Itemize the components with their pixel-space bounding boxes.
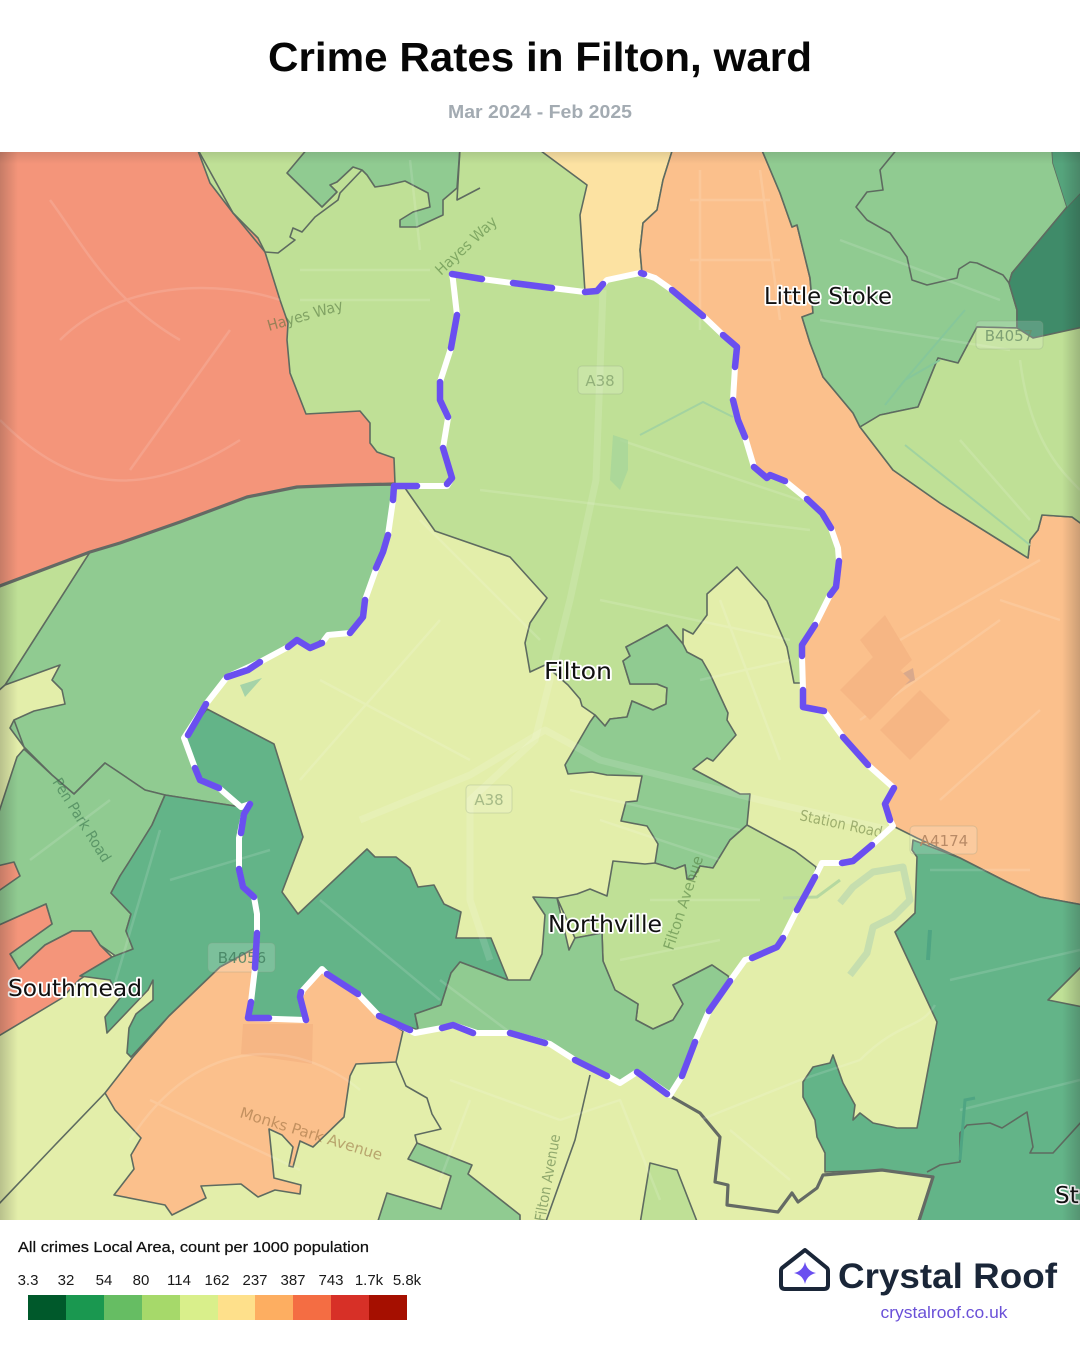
road shield: A38 centre [466,785,512,813]
legend colour scale [28,1295,407,1320]
region: top-left green blob [287,148,460,227]
region: red area north-west [0,148,395,587]
region: north-east dark green [1009,190,1080,338]
boundary lines between areas [0,148,1080,1224]
region: dark green west of ward and Northville [80,709,508,1057]
road shield: B4057: B4057 [985,327,1033,345]
legend value labels: 743 [318,1272,344,1289]
road shield: B4056 [208,943,275,972]
choropleth map [0,148,1080,1224]
legend value labels: 54 [96,1272,112,1289]
legend value labels: 3.3 [18,1272,38,1289]
street label: Pen Park Road: Pen Park Road [49,775,115,866]
logo icon: house with crystal [781,1250,828,1289]
region: top-left light green area [198,148,587,495]
ward boundary [184,273,894,1095]
legend value labels: 114 [167,1272,191,1289]
legend value labels: 237 [242,1272,268,1289]
region: east orange [640,148,1080,905]
road shield: A4174: A4174 [920,832,968,850]
road shield: A38 north [578,366,623,394]
place label: Filton: Filton [544,659,612,685]
street label: Hayes Way west: Hayes Way [265,296,345,335]
region: middle green [565,625,750,879]
place label: Southmead: Southmead [8,976,142,1002]
street label: Monks Park Avenue: Monks Park Avenue [238,1104,385,1164]
region: far-west strip [0,552,90,692]
place label: Northville: Northville [548,912,662,938]
region: ward north light green [394,273,839,726]
legend value labels: 1.7k [355,1272,384,1289]
logo wordmark: Crystal Roof [838,1257,1057,1296]
legend value labels: 387 [280,1272,306,1289]
legend value labels: 5.8k [393,1272,422,1289]
legend title: All crimes Local Area, count per 1000 population [18,1239,369,1256]
region: east light green [860,327,1080,558]
place label: Little Stoke: Little Stoke [764,284,892,310]
map edge shading [0,152,1080,1220]
street label: Hayes Way north: Hayes Way [431,212,501,279]
road shield: A38 centre: A38 [474,791,504,809]
region: south light green [640,1163,698,1224]
road shield: A38 north: A38 [585,372,615,390]
region: south orange [105,947,403,1215]
subtitle: date range: Mar 2024 - Feb 2025 [448,101,632,122]
region: Pen Park green [0,749,165,969]
region: pitch patch [241,1024,313,1064]
road shield: A4174 [910,826,977,854]
region: pale yellow north [537,148,673,292]
region: Filton south light green [557,825,816,1029]
region: Southmead red [0,904,112,1037]
road shield: B4057 [976,321,1043,349]
region: north-east corner green [1052,148,1080,207]
faint street network [0,160,1080,1200]
legend value labels: 162 [204,1272,230,1289]
region: Southmead red small [0,862,20,892]
road shield: B4056: B4056 [218,949,266,967]
region: east triangle [1048,965,1080,1007]
street label: Station Road: Station Road [798,806,884,841]
region: north-east green [761,148,1067,427]
region: south-east dark green [803,840,1080,1224]
street label: Filton Avenue: Filton Avenue [660,853,707,952]
region: Northville green [415,897,730,1095]
legend value labels: 80 [133,1272,149,1289]
place label: Stoke (cropped): St [1055,1183,1079,1209]
title: Crime Rates in Filton, ward [268,34,812,80]
water features and buildings [240,310,1030,1160]
region: south small green [377,1143,520,1224]
legend value labels [18,1272,422,1289]
street label: Filton Avenue south: Filton Avenue [531,1133,564,1223]
website link: crystalroof.co.uk [880,1304,1008,1322]
thick district boundaries [0,484,933,1224]
region: west green [5,485,395,807]
legend value labels: 32 [58,1272,74,1289]
